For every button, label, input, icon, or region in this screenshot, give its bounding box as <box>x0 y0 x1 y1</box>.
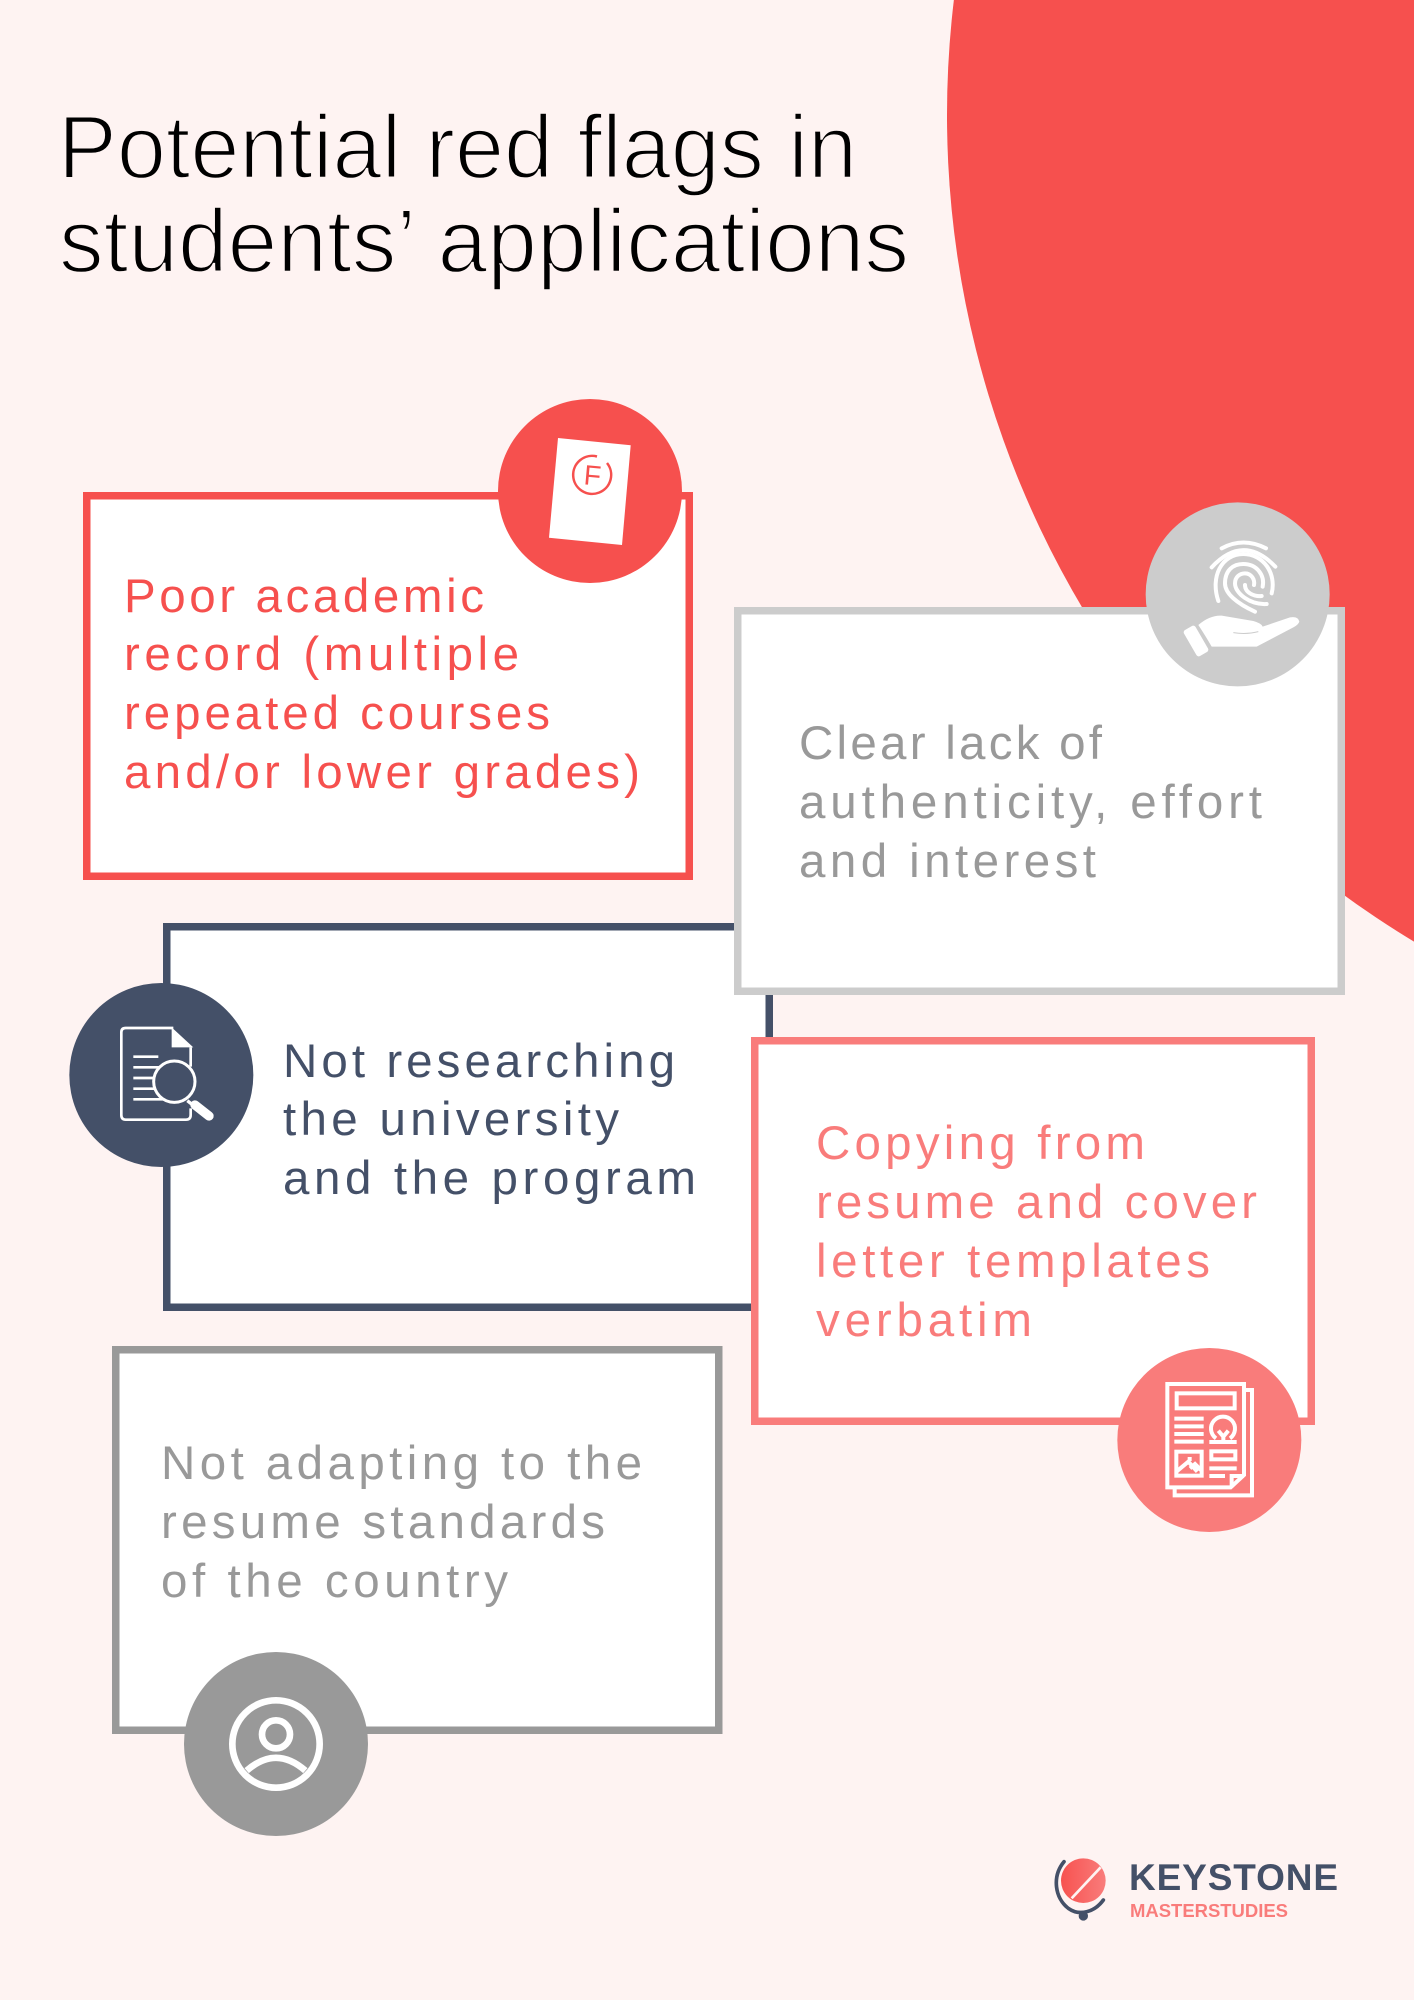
text: poor academic record: Poor academic <box>124 570 484 623</box>
icon: failed paper <box>498 399 682 583</box>
panel: poor academic record <box>87 399 689 876</box>
text: not researching: the university <box>283 1093 619 1146</box>
text: lack of authenticity: and interest <box>799 835 1096 888</box>
text: not adapting: Not adapting to the <box>161 1437 642 1490</box>
panel: not researching <box>69 927 769 1307</box>
text: not adapting: resume standards <box>161 1496 605 1549</box>
text: not researching: and the program <box>283 1152 696 1205</box>
panel: copying templates <box>755 1041 1311 1532</box>
icon: fingerprint on hand <box>1146 502 1330 686</box>
text: not adapting <box>161 1437 642 1608</box>
icon: document search <box>69 983 253 1167</box>
title: students’ applications <box>59 192 909 292</box>
text: lack of authenticity: Clear lack of <box>799 717 1103 770</box>
icon: failed paper: F <box>583 459 602 492</box>
text: copying templates: resume and cover <box>816 1176 1257 1229</box>
text: copying templates: Copying from <box>816 1117 1145 1170</box>
logo wordmark <box>1129 1857 1338 1921</box>
text: lack of authenticity: authenticity, effort <box>799 776 1262 829</box>
text: not researching: Not researching <box>283 1035 675 1088</box>
logo <box>1056 1857 1338 1921</box>
icon: user profile <box>184 1652 368 1836</box>
text: not adapting: of the country <box>161 1555 508 1608</box>
text: copying templates: letter templates <box>816 1235 1210 1288</box>
title <box>58 98 909 292</box>
decorative red circle <box>947 0 1414 1080</box>
text: poor academic record: record (multiple <box>124 628 519 681</box>
text: poor academic record: repeated courses <box>124 687 550 740</box>
text: not researching <box>283 1035 696 1205</box>
text: copying templates: verbatim <box>816 1294 1032 1347</box>
panel: lack of authenticity <box>738 502 1341 991</box>
text: poor academic record <box>124 570 640 799</box>
logo icon: globe <box>1056 1858 1106 1921</box>
title: Potential red flags in <box>58 98 857 198</box>
text: poor academic record: and/or lower grades) <box>124 746 640 799</box>
logo wordmark: KEYSTONE <box>1129 1857 1338 1898</box>
icon: resume document <box>1117 1348 1301 1532</box>
logo wordmark: MASTERSTUDIES <box>1130 1900 1288 1921</box>
text: lack of authenticity <box>799 717 1262 888</box>
text: copying templates <box>816 1117 1257 1347</box>
panel: not adapting <box>116 1350 719 1836</box>
